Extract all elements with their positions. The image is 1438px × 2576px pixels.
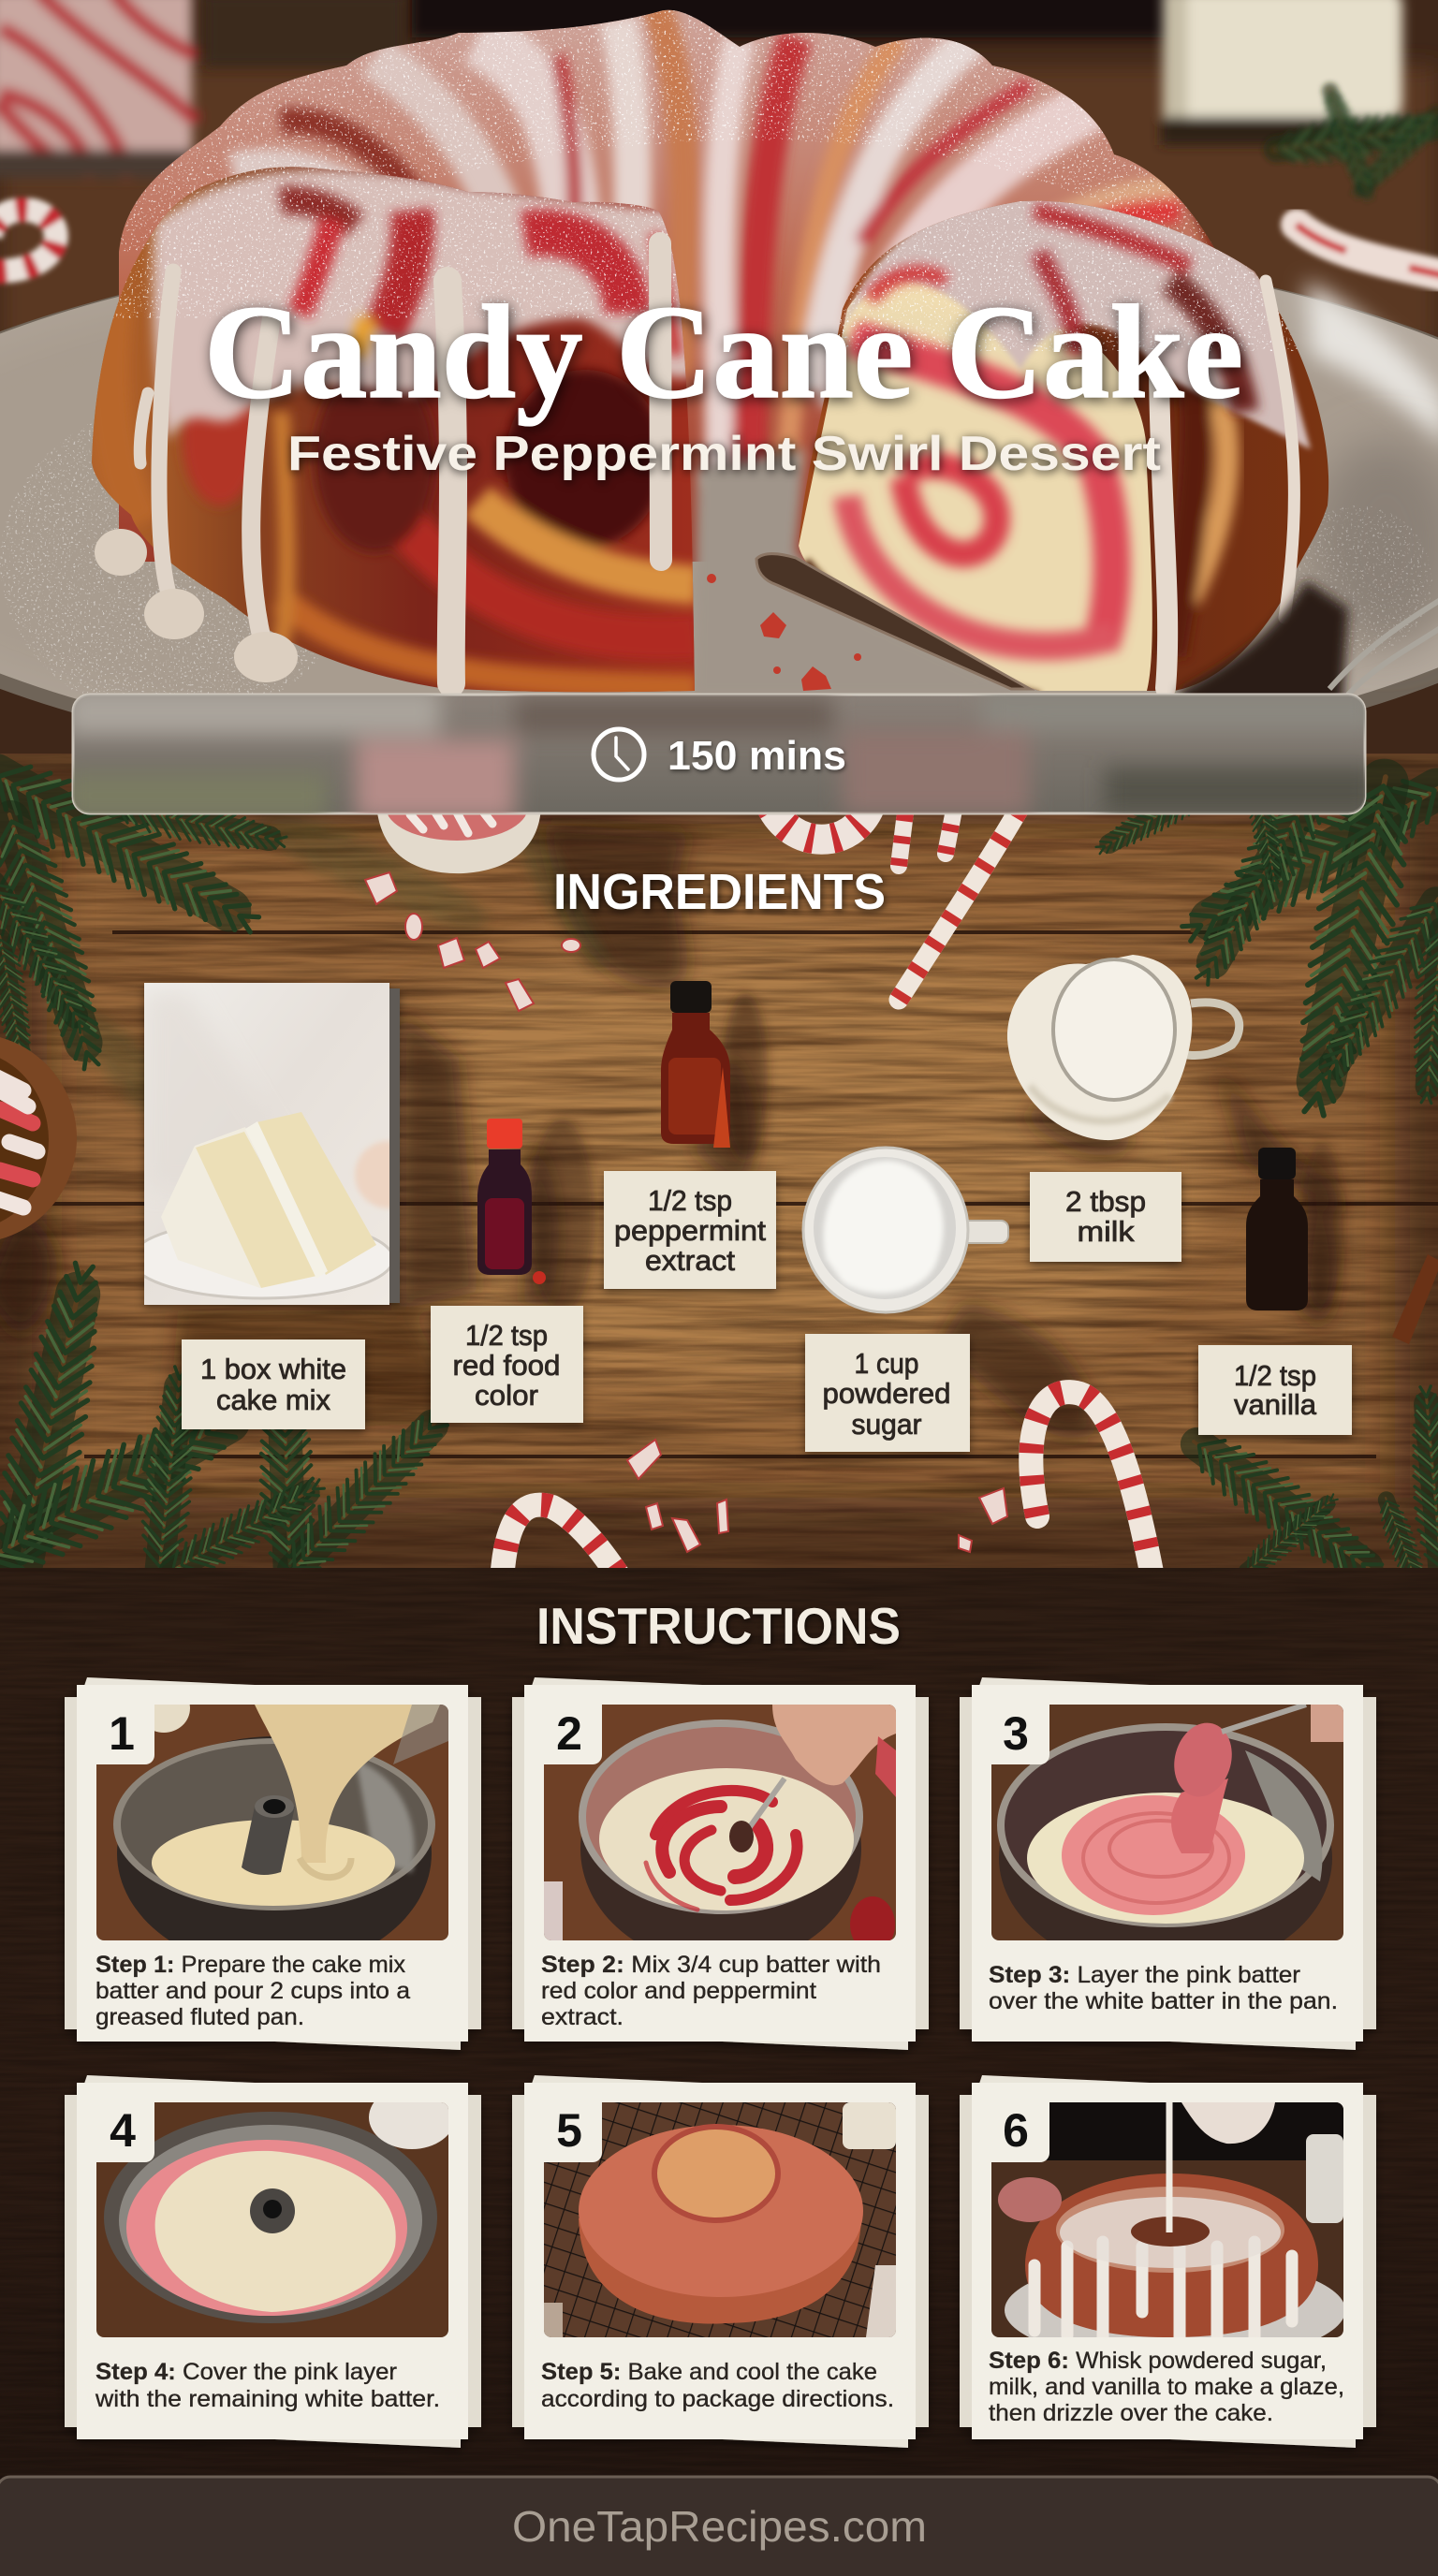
icon: milk glass xyxy=(1161,0,1414,145)
image: pouring batter xyxy=(96,1684,448,1970)
section: wood ingredients background xyxy=(0,739,1438,1613)
icon: clock xyxy=(594,729,644,780)
card: step 5 xyxy=(512,2075,929,2448)
label: cake mix xyxy=(182,1339,365,1429)
label: powdered sugar xyxy=(805,1334,970,1452)
icon: peppermint bowl top xyxy=(376,773,541,873)
step number: 4 xyxy=(110,2104,136,2157)
icon: candy cane top centre xyxy=(770,805,955,866)
icon: pine sprig hero xyxy=(1270,84,1438,205)
step text: Step 4: Cover the pink layer xyxy=(95,2359,390,2385)
label: red food color: 1/2 tsp xyxy=(465,1319,548,1352)
step text: Step 3: Layer the pink batter xyxy=(989,1962,1290,1988)
image: layering pink batter xyxy=(991,1705,1343,1975)
pine branch: top right xyxy=(1091,758,1438,1121)
step number xyxy=(972,1685,1049,1764)
label: vanilla xyxy=(1198,1345,1352,1435)
cake: right slice glaze top xyxy=(796,192,1329,449)
heading: ingredients: INGREDIENTS xyxy=(553,864,886,920)
footer bar xyxy=(0,2477,1438,2576)
step number: 6 xyxy=(1003,2104,1029,2157)
step text: greased fluted pan. xyxy=(95,2004,304,2030)
step text: Step 5: Bake and cool the cake xyxy=(541,2359,871,2385)
icon: candy jar xyxy=(0,0,197,178)
cast shadows xyxy=(0,824,1348,1439)
icon: cinnamon sticks xyxy=(1392,1254,1438,1344)
label: milk: 2 tbsp xyxy=(1065,1185,1146,1218)
card: step 2 xyxy=(512,1677,929,2050)
step text: over the white batter in the pan. xyxy=(989,1988,1338,2014)
branch shadows xyxy=(66,800,618,1206)
cake crumbs xyxy=(707,574,861,691)
label: peppermint extract: extract xyxy=(645,1244,735,1277)
wood vignette shading xyxy=(0,739,1438,1601)
background jar item xyxy=(206,53,360,67)
label: cake mix: 1 box white xyxy=(200,1353,346,1385)
label: milk xyxy=(1030,1172,1181,1262)
label: milk: milk xyxy=(1077,1215,1135,1248)
icon: candy cane tall xyxy=(899,807,1020,1000)
subtitle: Festive Peppermint Swirl Dessert xyxy=(287,427,1161,481)
icon: cake slice xyxy=(161,1112,376,1288)
pine branch: bottom right xyxy=(1179,1384,1438,1613)
step text: milk, and vanilla to make a glaze, xyxy=(989,2374,1344,2400)
icon: red food colour bottle xyxy=(477,1119,595,1315)
cake: left slice xyxy=(84,159,702,702)
icon: candy cane hook bottom left xyxy=(502,1505,623,1582)
step text: Step 2: Mix 3/4 cup batter with xyxy=(541,1952,865,1978)
step number: 1 xyxy=(109,1707,135,1760)
step text: extract. xyxy=(541,2004,624,2030)
step text: according to package directions. xyxy=(541,2386,894,2412)
card: step 6 xyxy=(960,2075,1376,2448)
card: step 4 xyxy=(65,2075,481,2448)
step number xyxy=(77,1685,154,1764)
step text: then drizzle over the cake. xyxy=(989,2400,1273,2426)
step text: Step 6: Whisk powdered sugar, xyxy=(989,2348,1319,2374)
label: cake mix: cake mix xyxy=(216,1383,330,1416)
step number xyxy=(972,2083,1049,2162)
step number: 3 xyxy=(1003,1707,1029,1760)
cake: back ring xyxy=(112,0,1236,562)
icon: candy cane hook bottom right xyxy=(1031,1392,1153,1582)
step text: batter and pour 2 cups into a xyxy=(95,1978,410,2004)
icon: powdered sugar cup xyxy=(803,1148,1008,1312)
label: vanilla: vanilla xyxy=(1234,1388,1317,1421)
time bar xyxy=(66,688,1376,819)
label: powdered sugar: sugar xyxy=(852,1408,921,1441)
step text: red color and peppermint xyxy=(541,1978,816,2004)
peppermint crumbs xyxy=(365,872,1007,1552)
serving plate xyxy=(0,270,1438,712)
label: peppermint extract xyxy=(604,1171,776,1289)
icon: peppermint extract bottle xyxy=(661,981,768,1161)
label: red food color xyxy=(431,1306,583,1423)
icon: candy bowl left xyxy=(0,1033,77,1243)
image: glazing the cake xyxy=(991,2102,1345,2363)
card: step 3 xyxy=(960,1677,1376,2050)
pine branch: top left xyxy=(0,743,289,1076)
card: step 1 xyxy=(65,1677,481,2050)
icon: vanilla bottle xyxy=(1246,1142,1343,1310)
title: Candy Cane Cake xyxy=(204,278,1243,426)
section: hero photo xyxy=(0,0,1438,791)
image: baked cake on rack xyxy=(544,2102,896,2337)
plank gaps xyxy=(0,932,1438,1456)
step text: Step 1: Prepare the cake mix xyxy=(95,1952,403,1978)
label: vanilla: 1/2 tsp xyxy=(1234,1359,1316,1392)
step text: with the remaining white batter. xyxy=(95,2386,440,2412)
label: powdered sugar: powdered xyxy=(822,1377,951,1410)
icon: blurred candy cane right xyxy=(1297,225,1438,276)
cake: right slice xyxy=(796,187,1329,697)
step number: 5 xyxy=(556,2104,582,2157)
pine branch: bottom left xyxy=(0,1258,465,1593)
icon: cake mix box xyxy=(131,983,422,1305)
cake: swirled cut face xyxy=(796,253,1161,697)
image: mixing red batter xyxy=(544,1705,896,1966)
step number xyxy=(524,1685,602,1764)
label: red food color: color xyxy=(475,1379,538,1412)
time text: 150 mins xyxy=(668,733,846,779)
image: white batter over pink xyxy=(96,2086,455,2337)
plate gap between slices xyxy=(693,449,1039,697)
step number: 2 xyxy=(556,1707,582,1760)
label: peppermint extract: peppermint xyxy=(614,1214,766,1247)
label: red food color: red food xyxy=(453,1349,560,1382)
label: powdered sugar: 1 cup xyxy=(854,1347,919,1380)
glaze drips: left slice xyxy=(95,243,661,683)
glaze drips: right slice xyxy=(1159,281,1294,688)
footer text: OneTapRecipes.com xyxy=(512,2502,927,2551)
icon: milk jug xyxy=(1007,955,1240,1140)
cake server xyxy=(756,554,1438,760)
icon: blurred candy cane left xyxy=(0,210,56,271)
step number xyxy=(524,2083,602,2162)
step number xyxy=(77,2083,154,2162)
section: instructions background xyxy=(0,1568,1438,2576)
label: peppermint extract: 1/2 tsp xyxy=(648,1184,732,1217)
heading: instructions: INSTRUCTIONS xyxy=(536,1597,901,1655)
